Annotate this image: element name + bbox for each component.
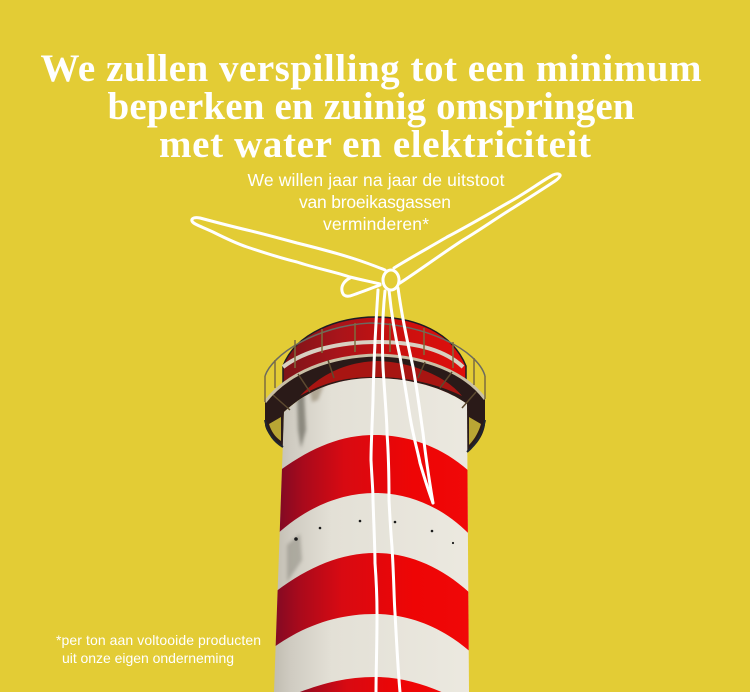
subtitle: We willen jaar na jaar de uitstoot: [248, 170, 505, 190]
rust stains: [297, 392, 306, 448]
subtitle: [248, 170, 505, 234]
tower line D: [398, 288, 433, 503]
tower line B: [382, 291, 400, 692]
footnote: [56, 632, 261, 666]
footnote: uit onze eigen onderneming: [62, 650, 234, 666]
chimney tower: [265, 317, 485, 692]
title: met water en elektriciteit: [159, 123, 591, 166]
platform red band: [300, 361, 462, 396]
wind turbine line drawing: [192, 174, 560, 692]
left blade: [192, 218, 385, 284]
tower line A: [371, 290, 378, 692]
blade hook: [342, 278, 380, 296]
title: We zullen verspilling tot een minimum: [40, 47, 702, 90]
platform roof: [283, 317, 466, 395]
hub: [383, 270, 399, 290]
tower line C: [389, 290, 433, 503]
right blade: [394, 174, 560, 283]
subtitle: verminderen*: [323, 214, 429, 234]
railing and walkway: [265, 323, 485, 452]
footnote: *per ton aan voltooide producten: [56, 632, 261, 648]
title: [40, 47, 702, 166]
subtitle: van broeikasgassen: [299, 192, 451, 212]
title: beperken en zuinig omspringen: [108, 85, 635, 128]
gaps in platform struts: [269, 417, 481, 445]
platform underside: [265, 355, 485, 452]
chimney body: [270, 370, 475, 692]
rivet dots: [294, 520, 454, 544]
